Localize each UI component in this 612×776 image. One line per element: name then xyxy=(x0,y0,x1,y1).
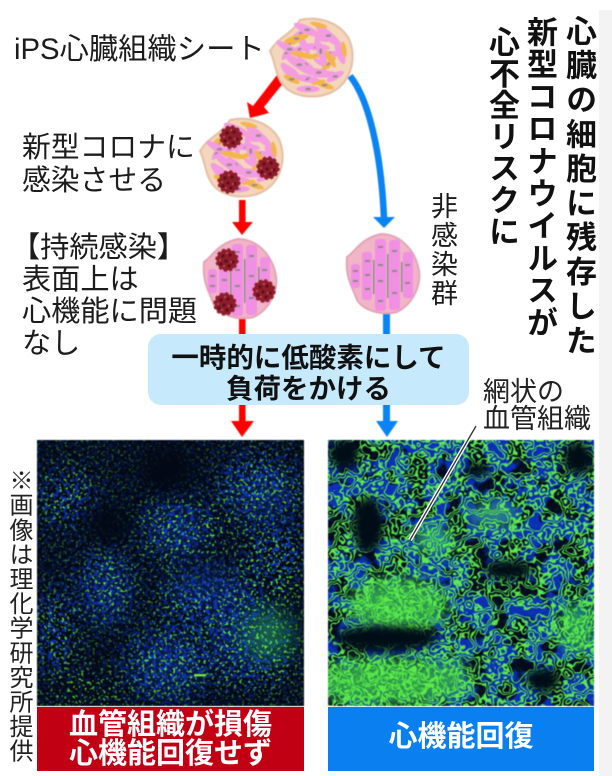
label: mesh-like vascular tissue: 網状の xyxy=(483,377,564,407)
label: vascular damage, no recovery: 心機能回復せず xyxy=(69,738,272,770)
title: 新型コロナウイルスが xyxy=(522,16,557,339)
callout: temporary low oxygen load: 一時的に低酸素にして xyxy=(171,342,446,373)
callout: temporary low oxygen load xyxy=(148,334,469,405)
icon: persistently infected sheet xyxy=(204,239,276,318)
label: persistent infection: 【持続感染】 xyxy=(11,232,186,264)
label: persistent infection xyxy=(11,232,197,360)
label: non-infected group: 非感染群 xyxy=(427,192,457,308)
arrow: blue connector into box xyxy=(383,313,390,336)
label: persistent infection: 表面上は xyxy=(22,264,139,296)
title: 心不全リスクに xyxy=(484,26,519,247)
label: infect with coronavirus: 感染させる xyxy=(22,165,166,197)
background strip xyxy=(599,10,612,776)
label: iPS heart tissue sheet: iPS心臓組織シート xyxy=(14,33,265,66)
arrow: red, infection to persistent infection xyxy=(232,200,253,235)
label: cardiac function recovered xyxy=(328,707,594,771)
icon: iPS heart tissue sheet xyxy=(270,18,353,97)
micrograph: reticular vascular tissue recovered xyxy=(327,439,595,707)
label: mesh-like vascular tissue: 血管組織 xyxy=(483,404,591,434)
arrow: red connector into box xyxy=(239,318,246,336)
callout: temporary low oxygen load: 負荷をかける xyxy=(226,373,391,404)
label: vascular damage, no recovery: 血管組織が損傷 xyxy=(69,709,272,741)
arrow: blue curve to non-infected group xyxy=(350,76,395,228)
label: mesh-like vascular tissue xyxy=(483,377,591,434)
label: vascular damage, no recovery xyxy=(37,707,304,771)
label: infect with coronavirus: 新型コロナに xyxy=(22,132,195,164)
label: cardiac function recovered: 心機能回復 xyxy=(388,721,534,753)
arrow: red, box to left micrograph xyxy=(231,403,254,437)
micrograph: damaged vascular tissue xyxy=(36,439,305,707)
title xyxy=(484,15,597,359)
label: infect with coronavirus xyxy=(22,132,195,197)
title: 心臓の細胞に残存した xyxy=(561,15,596,359)
icon: infected sheet xyxy=(200,118,283,197)
icon: non-infected sheet xyxy=(347,234,419,313)
label: persistent infection: 心機能に問題 xyxy=(22,296,197,328)
arrow: red, sheet to infection xyxy=(247,75,285,118)
note: image credit: ※画像は理化学研究所提供 xyxy=(5,468,32,763)
arrow: blue, box to right micrograph xyxy=(376,403,398,437)
label: persistent infection: なし xyxy=(22,328,80,360)
